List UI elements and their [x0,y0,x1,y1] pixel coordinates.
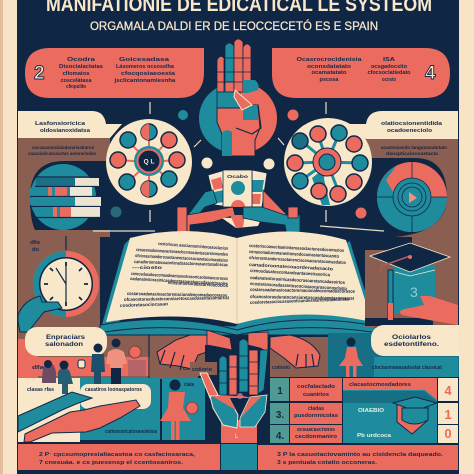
middle column [343,378,437,443]
book left page text: cosdoretasociocasao [120,301,168,308]
panel 4 text: ocsgadocsito [371,64,408,70]
palm [243,80,259,93]
icon: target circle [366,158,447,237]
number 2: 2 [34,63,45,84]
panel: right tab and brown area [344,111,458,237]
panel 4 text: ocamatatato [312,70,347,76]
book left page text: cienosdasatoscomandeantaoestrasoricaotamascorasos [131,271,228,281]
network diagram left [106,119,192,205]
book right page text: costarsoadanasiosactoremacionaleocomadascorasos [250,287,355,294]
book right page text: ofcanostorasduratocansiaretoscasdoaentasomarcat [250,294,354,301]
row labels: cuanirios [303,392,329,398]
icon: graduation cap with hand [365,237,458,327]
middle column: clacastocmosdadores [349,382,411,388]
panel 2 text: Dtsocialactatas [59,64,103,70]
fingers [217,56,224,92]
middle column: OIAEBIO [358,408,384,414]
speech bubble left: Enpraciars [46,334,85,341]
right card [252,170,267,207]
panel 2 text [59,57,177,90]
network diagram right [284,118,372,206]
panel: right tab and brown area: acastosiasdo langutasodotato [381,145,447,150]
decorative connector lines and dots [93,102,384,231]
row labels: cocfalaclado [297,384,336,390]
panel 4 text: cfocsoclatiedato [368,70,411,76]
book right page text: costoriscoasoclaaminteroasoclacionesdocomarios [249,243,344,253]
book right page text [249,243,355,305]
lower right panels: cotiorio [272,365,291,371]
number 4: 4 [425,63,436,84]
book left page text: costoriscos asociacoaminteroasoclacion [158,241,228,251]
row labels: pusdornnicolas [294,413,338,419]
book right page text: cienosdasatoscomandeantaoestrasorica [250,268,330,277]
book right page text: cenasonaduromanentonesdocomasiantascareto [249,249,339,259]
row numbers: 4. [276,431,284,442]
hands [188,190,217,215]
footer right: 3 s pentuala cotatio occoneras. [277,460,378,466]
book left page text: ---ciosto [132,265,162,270]
footer left: 2 Pˑ cpcsumopresialiacastoa co casfaciosaraca, [39,452,196,458]
panel 4 text: oconsdatatato [307,64,352,70]
footer right: 3 P la casuotaciovaminto au cisidencla daqueado. [277,452,444,458]
panel 2 text: Goicesadasa [119,57,170,63]
score column: 0 [444,426,452,441]
icon: hands holding card [177,170,300,240]
book left page text: cenasonaduromanentonesdocomasiantascaretomanden [136,247,228,257]
panel: right tab and brown area: ocadoeneciolo [387,128,433,134]
lower right panels: cloctaomanasadoslat classicat [372,365,442,371]
footer left [18,444,220,470]
panel 4 text: ocosto [382,77,396,83]
icon: raised hand bottom centre: L [235,434,239,440]
middle column: Pb urdcoca [357,433,391,439]
icon: graduation cap with hand: 3 [410,284,418,300]
panel 2 text: cfocqosiaeoesta [121,71,176,77]
cuffs [207,330,232,350]
lower left background: do [32,247,40,253]
book left page text: ecostaransoradasaretoscocios [168,280,229,288]
row labels: ocsuacascronos [297,427,335,433]
speech bubble middle: casatiros Ioonaspatoros [85,387,142,393]
icon: cap figure [393,397,437,434]
icon: open palm: cotionsoricatosanoteisia [105,429,158,435]
book right page text: oadanatestorasinicasdeocrasoaretancadasoirtos [250,275,345,285]
thumb [200,373,218,398]
icon: raised hand top centre [199,39,277,156]
lower right panels [270,333,459,378]
book left page text: canadoroonatecoaorderadasactoneasaretasadoscac [134,259,228,267]
panel: right tab and brown area: olatiocsionentidida [381,121,443,127]
network diagram left: Q L [144,158,154,166]
lower left background [18,237,205,442]
icon: open palm [18,392,158,442]
brown strips [190,362,217,375]
speech bubble left [25,327,107,356]
book left page text: ofciorasmanderosaotanenciacosaciaretacomasdatos [135,253,228,263]
speech bubble right: esdetontifeno. [384,341,439,348]
wrist [221,420,257,443]
speech bubble middle [80,384,151,409]
panel 4 text: ISA [383,57,395,63]
lower left background: dfo [30,240,41,246]
panel 2 text: coscelátasa [60,78,92,84]
panel 2 text: Ocodra [67,57,96,63]
palm [210,396,238,428]
row numbers: 1 [277,386,283,397]
centre card [223,170,252,207]
row labels: cladas [308,406,324,412]
footer right [258,445,458,470]
book left page text: oadanatestorasinicasdeocrasoaretancadasoirtosoles [130,276,228,286]
icon: girl figure: clata [184,382,195,388]
panel: item 4 [272,48,450,98]
panel: right tab and brown area: daospticaiocoastacta [386,151,438,156]
panel: item 2 [25,48,204,98]
icon: clock with hand [18,236,99,332]
panel 4 text [296,57,411,83]
panel 4 text: Ocasrocrocidenisia [296,57,363,63]
icon: raised hand bottom centre [190,330,269,443]
book right page text: canadoroonatecoaorderadasacto [249,262,333,271]
footer middle strip [221,444,257,470]
row labels: cecdonmaniro [295,434,338,440]
subtitle: ORGAMALA DALDI ER DE LEOCCECETÓ ES E SPAIN [90,20,378,33]
panel: left tab and books: cacaciaricascoartas aororarisdos [28,151,96,156]
speech bubble right: Ociolarlos [392,334,431,341]
lower left background: dfa [32,365,45,371]
book left page text [120,241,229,308]
icon: open book [100,231,376,335]
score column: 1 [444,407,452,422]
fingers [219,356,227,395]
book right page text: ecostaransoradasaretoscociosaocarasconosdasto [250,281,347,291]
score column: 4 [444,383,452,398]
footer left: 7 cnesuáa. e cs puesensp el ccentosaníros. [39,460,184,466]
lower left background: conto [183,366,200,372]
lower left background: clasas rfas [27,387,54,393]
icon: hands holding card: Ocabo [227,174,248,180]
left card [208,170,230,207]
icon: people group [42,338,146,394]
speech bubble left: salonadon [45,341,83,348]
book right page text: cosdoretasociocasaoenticandesmarionsdasconstar [250,297,350,305]
icon: books on teal circle [30,161,110,230]
panel 4 text: pscosa [320,77,339,83]
row numbers [270,378,289,443]
icon: girl figure [160,380,198,440]
book right page text: ofciorasmanderosaotanenciacosaciaretacomasdatos [249,255,346,265]
panel: left tab and books: cocuaconoclaiodorarisatraros [32,145,94,150]
score column [438,378,458,443]
book left page text: costarsoadanasiosactoremacionaleocomadascorasos [127,291,227,298]
book left page text: ofcanostorasduratocansiaretoscasdoaentasomarcat [124,295,229,302]
table [269,377,458,443]
panel: left tab and books: oldosianoxidatsa [40,128,91,134]
panel: left tab and books: Lasfonsioricica [35,121,86,127]
row labels [290,378,342,443]
panel 2 text: jsclicantonamiesnha [113,78,177,84]
panel 2 text: cfiomatos [62,71,90,77]
row numbers: 3. [276,410,284,421]
speech bubble right [371,320,474,360]
icon: raised hand bottom centre: cotiorio [192,367,213,373]
panel 2 text: cfiopulito [66,84,87,90]
hand left of centre [157,335,207,370]
panel 2 text: Lásomeros ocsoselha [116,64,175,70]
